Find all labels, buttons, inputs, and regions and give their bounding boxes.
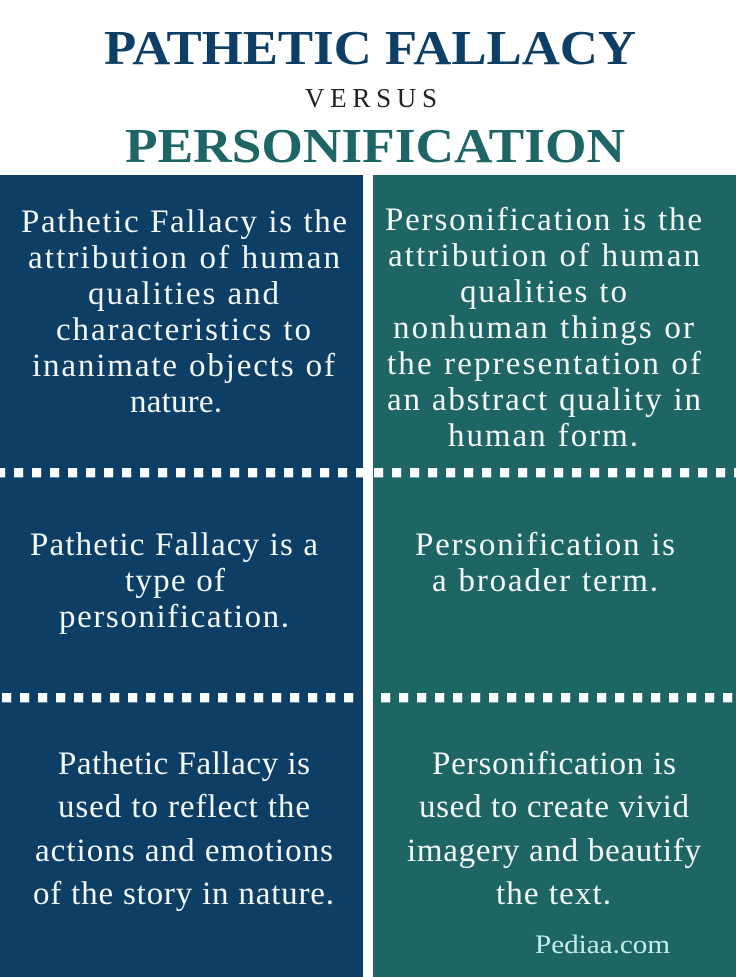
text block: personification use: the text. (496, 876, 611, 912)
text block: pathetic fallacy definition: nature. (130, 384, 222, 420)
text block: pathetic fallacy use: Pathetic Fallacy is (58, 746, 310, 782)
text block: pathetic fallacy type: Pathetic Fallacy is a (30, 527, 318, 563)
text block: personification definition: nonhuman things or (393, 310, 694, 346)
text block: pathetic fallacy definition: attribution of human (28, 240, 340, 276)
row divider: lower dotted line (2, 693, 733, 702)
title: personification: PERSONIFICATION (125, 118, 625, 173)
text block: pathetic fallacy definition: Pathetic Fallacy is the (21, 204, 347, 240)
text block: pathetic fallacy type: personification. (59, 599, 289, 635)
text block: personification use: used to create vivid (419, 789, 690, 825)
text block: personification definition: an abstract quality in (387, 382, 701, 418)
row divider: upper dotted line (0, 468, 736, 477)
text block: pathetic fallacy definition (21, 204, 347, 420)
text block: pathetic fallacy type (30, 527, 318, 635)
text block: personification scope: a broader term. (432, 563, 658, 599)
text block: pathetic fallacy use (33, 746, 334, 912)
text block: personification scope: Personification is (415, 527, 675, 563)
text block: pathetic fallacy definition: inanimate objects of (32, 348, 335, 384)
text block: personification definition: human form. (448, 418, 638, 454)
text block: personification use: Personification is (432, 746, 676, 782)
text block: personification definition: attribution of human (388, 238, 700, 274)
text block: personification definition (385, 202, 702, 454)
text block: pathetic fallacy definition: characteristics to (56, 312, 311, 348)
text block: pathetic fallacy definition: qualities and (88, 276, 280, 312)
title: pathetic fallacy: PATHETIC FALLACY (104, 20, 636, 75)
text block: personification definition: qualities to (460, 274, 627, 310)
text block: personification scope (415, 527, 675, 599)
text block: personification use (407, 746, 702, 912)
panel: personification column (373, 175, 736, 977)
text block: personification definition: Personification is the (385, 202, 702, 238)
text block: personification use: imagery and beautify (407, 833, 702, 869)
text block: personification definition: the representation of (387, 346, 701, 382)
text block: pathetic fallacy type: type of (125, 563, 225, 599)
text block: pathetic fallacy use: actions and emotions (35, 833, 333, 869)
subtitle: versus: VERSUS (305, 83, 437, 113)
text block: pathetic fallacy use: of the story in nature. (33, 876, 334, 912)
brand: Pediaa.com: Pediaa.com (535, 930, 670, 959)
panel: pathetic fallacy column (0, 175, 363, 977)
text block: pathetic fallacy use: used to reflect the (58, 789, 310, 825)
